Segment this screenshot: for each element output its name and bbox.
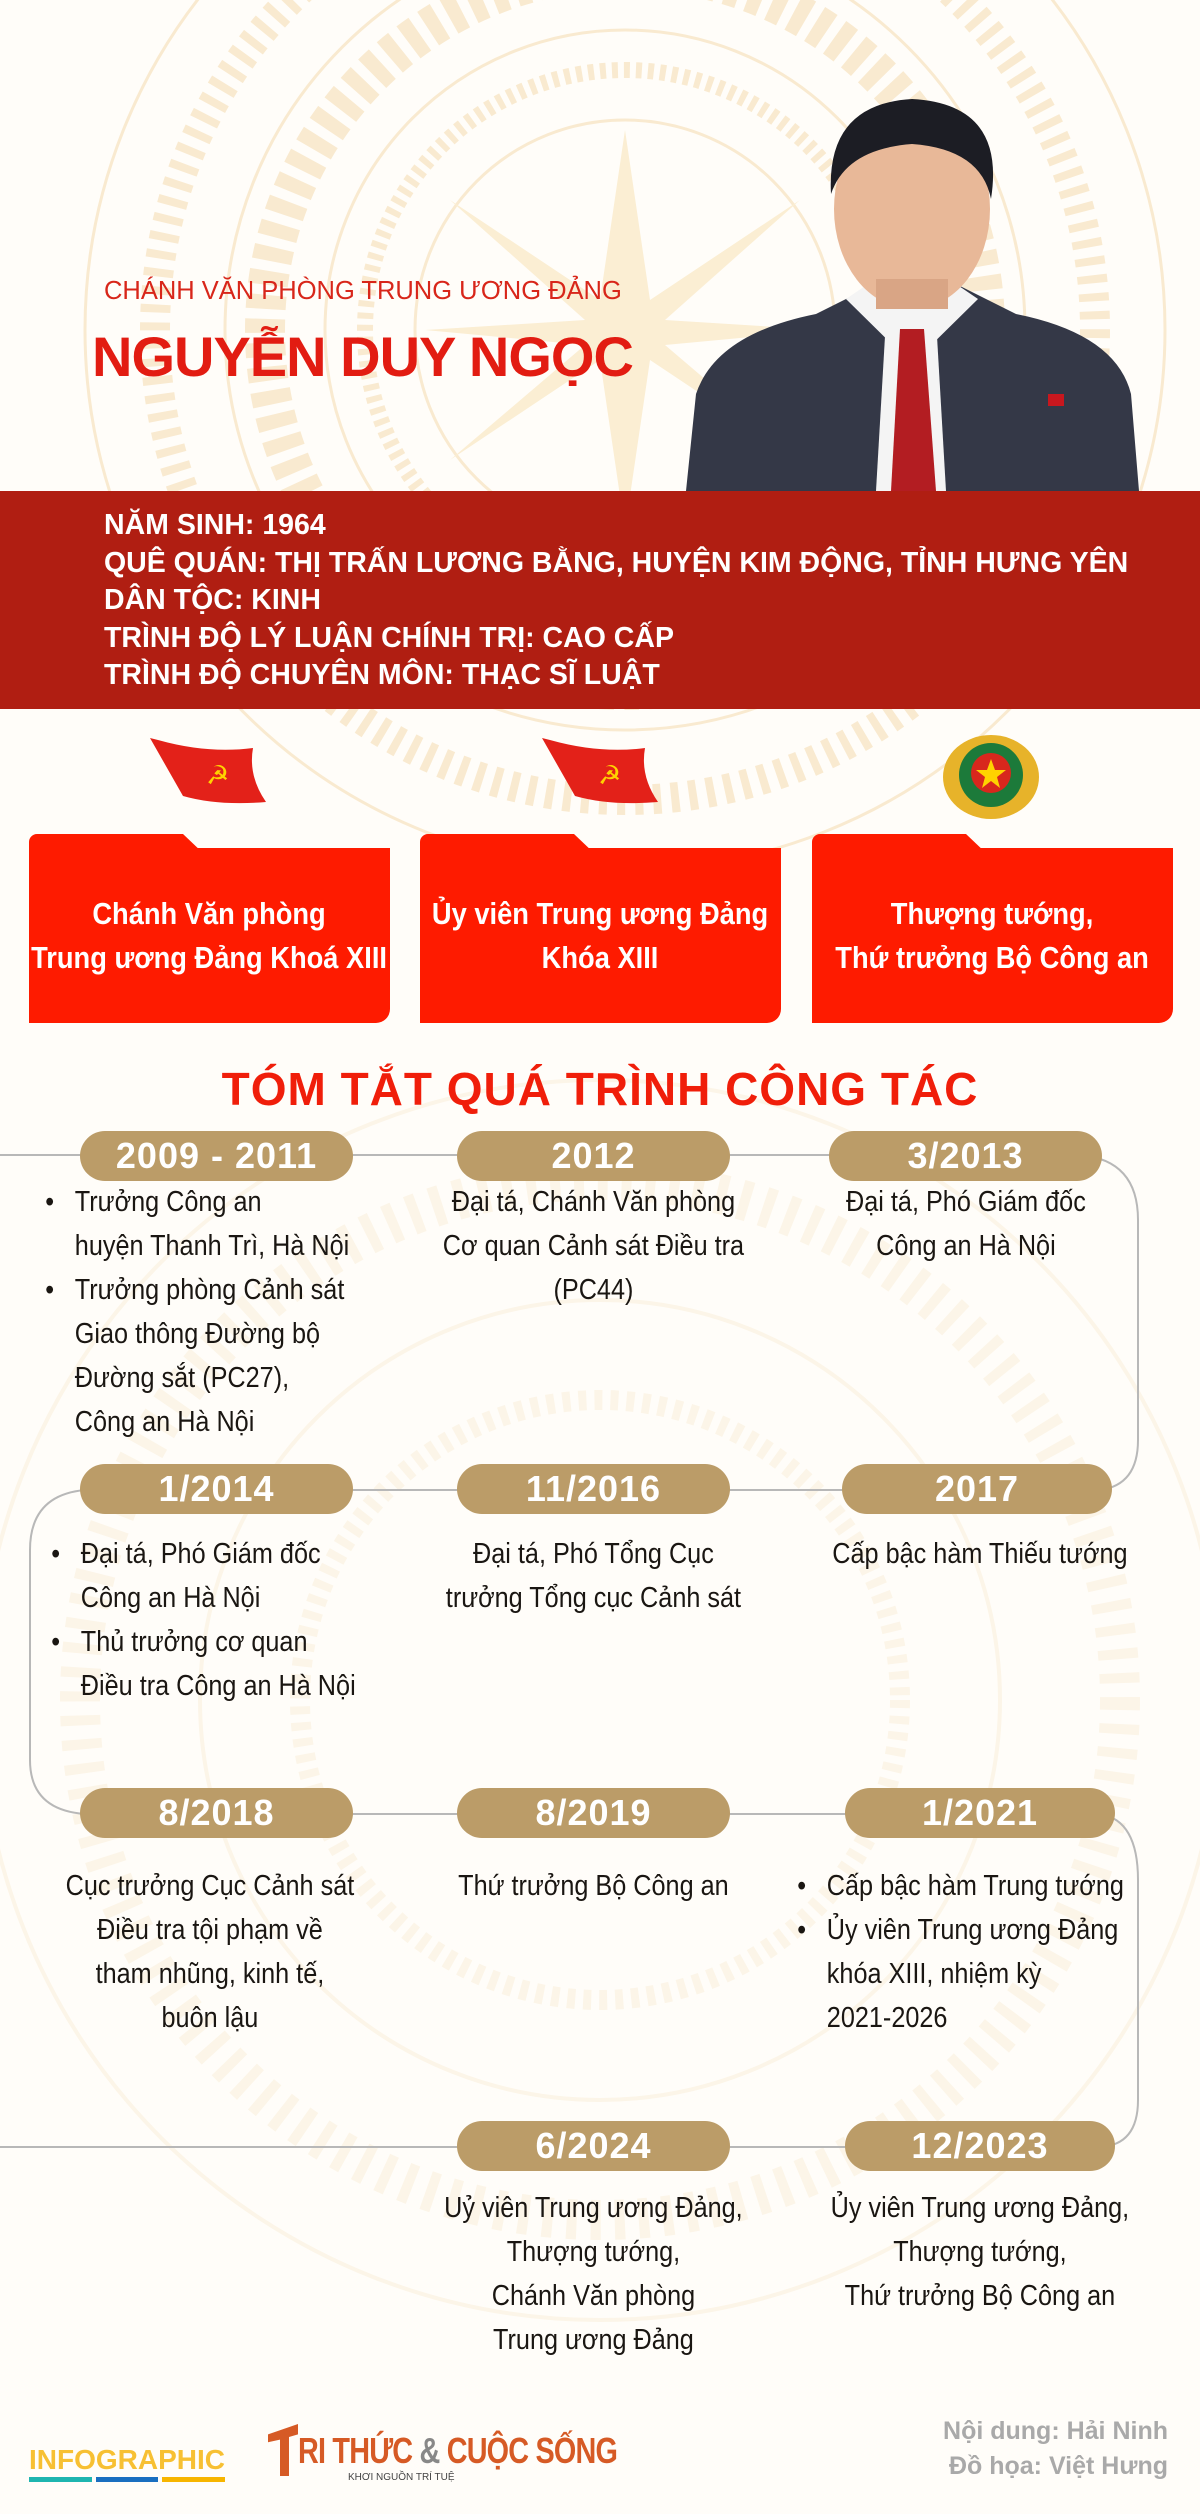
- text: 3/2013: Công an Hà Nội: [876, 1230, 1056, 1262]
- section title: TÓM TẮT QUÁ TRÌNH CÔNG TÁC: [222, 1063, 978, 1115]
- info text: QUÊ QUÁN: THỊ TRẤN LƯƠNG BẰNG, HUYỆN KIM ĐỘNG, TỈNH HƯNG YÊN: [104, 546, 1128, 578]
- text: 12/2023: Thứ trưởng Bộ Công an: [845, 2280, 1115, 2312]
- icon: party flag 1: ☭: [206, 761, 229, 791]
- card 3: Thứ trưởng Bộ Công an: [836, 940, 1149, 974]
- text: 12/2023: Ủy viên Trung ương Đảng,: [831, 2192, 1129, 2224]
- text: 2017: Cấp bậc hàm Thiếu tướng: [832, 1538, 1128, 1570]
- info text: TRÌNH ĐỘ CHUYÊN MÔN: THẠC SĨ LUẬT: [104, 659, 660, 691]
- text: 12/2023: Thượng tướng,: [893, 2236, 1067, 2268]
- text: 2009-2011: Trưởng Công an: [75, 1186, 262, 1218]
- pill: 6/2024: [457, 2121, 730, 2171]
- footer: infographic logo: INFOGRAPHIC: [29, 2444, 225, 2475]
- text: 8/2018: buôn lậu: [162, 2002, 258, 2034]
- text: 8/2018: Điều tra tội phạm về: [97, 1914, 323, 1946]
- footer: credits: Đồ họa: Việt Hưng: [949, 2452, 1168, 2480]
- card 3: [812, 834, 1173, 1023]
- text: 2009-2011: Giao thông Đường bộ: [75, 1318, 320, 1350]
- card 2: Khóa XIII: [542, 940, 659, 974]
- footer: publication logo: KHƠI NGUỒN TRÍ TUỆ: [348, 2472, 455, 2483]
- text: 6/2024: [444, 2192, 743, 2356]
- pill: 1/2014: [80, 1464, 353, 1514]
- icon: party flag 1: [150, 738, 266, 804]
- pill: 11/2016: [457, 1464, 730, 1514]
- subtitle: CHÁNH VĂN PHÒNG TRUNG ƯƠNG ĐẢNG: [104, 277, 622, 305]
- pill: 1/2021: 1/2021: [922, 1792, 1038, 1833]
- text: 1/2021: Cấp bậc hàm Trung tướng: [827, 1870, 1124, 1902]
- pill: 1/2014: 1/2014: [158, 1468, 275, 1509]
- text: 6/2024: Uỷ viên Trung ương Đảng,: [444, 2192, 743, 2224]
- text: 8/2018: [66, 1870, 354, 2034]
- text: 1/2021: khóa XIII, nhiệm kỳ: [827, 1958, 1041, 1990]
- pill: 6/2024: 6/2024: [535, 2125, 652, 2166]
- pill: 2012: 2012: [551, 1135, 636, 1176]
- text: 11/2016: trưởng Tổng cục Cảnh sát: [446, 1582, 741, 1614]
- portrait photo: [686, 99, 1139, 491]
- text: 3/2013: [846, 1186, 1086, 1262]
- pill: 1/2021: [845, 1788, 1115, 1838]
- text: 6/2024: Trung ương Đảng: [493, 2324, 694, 2356]
- pill: 8/2019: [457, 1788, 730, 1838]
- icon: police emblem: [943, 735, 1039, 819]
- text: 11/2016: Đại tá, Phó Tổng Cục: [473, 1538, 714, 1570]
- footer: credits: Nội dung: Hải Ninh: [943, 2417, 1168, 2445]
- text: 3/2013: Đại tá, Phó Giám đốc: [846, 1186, 1086, 1218]
- text: 1/2014: Điều tra Công an Hà Nội: [81, 1670, 356, 1702]
- text: 1/2021: 2021-2026: [827, 2002, 947, 2034]
- info text: DÂN TỘC: KINH: [104, 584, 321, 616]
- card 1: Chánh Văn phòng: [93, 896, 326, 930]
- text: 2009-2011: Công an Hà Nội: [75, 1406, 254, 1438]
- text: 2009-2011: Trưởng phòng Cảnh sát: [75, 1274, 344, 1306]
- text: 1/2014: Đại tá, Phó Giám đốc: [81, 1538, 321, 1570]
- text: 1/2014: [52, 1538, 356, 1702]
- pill: 8/2019: 8/2019: [535, 1792, 652, 1833]
- name title: NGUYỄN DUY NGỌC: [92, 325, 633, 388]
- pill: 8/2018: 8/2018: [158, 1792, 275, 1833]
- icon: party flag 2: ☭: [598, 761, 621, 791]
- text: 1/2014: Công an Hà Nội: [81, 1582, 260, 1614]
- text: 8/2018: Cục trưởng Cục Cảnh sát: [66, 1870, 354, 1902]
- text: 2012: Cơ quan Cảnh sát Điều tra: [443, 1230, 744, 1262]
- info text: NĂM SINH: 1964: [104, 509, 326, 541]
- text: 1/2021: Ủy viên Trung ương Đảng: [827, 1914, 1118, 1946]
- pill: 8/2018: [80, 1788, 353, 1838]
- pill: 2017: 2017: [935, 1468, 1019, 1509]
- text: 8/2019: Thứ trưởng Bộ Công an: [458, 1870, 729, 1902]
- footer: publication logo: RI THỨC & CUỘC SỐNG: [298, 2430, 617, 2471]
- pill: 3/2013: 3/2013: [907, 1135, 1024, 1176]
- text: 2009-2011: Đường sắt (PC27),: [75, 1362, 289, 1394]
- info text: TRÌNH ĐỘ LÝ LUẬN CHÍNH TRỊ: CAO CẤP: [104, 622, 674, 654]
- pill: 11/2016: 11/2016: [526, 1468, 661, 1509]
- text: 11/2016: [446, 1538, 741, 1614]
- text: 1/2014: Thủ trưởng cơ quan: [81, 1626, 308, 1658]
- text: 12/2023: [831, 2191, 1129, 2312]
- pill: 12/2023: [845, 2121, 1115, 2171]
- text: 2012: (PC44): [553, 1274, 633, 1306]
- info text: [104, 508, 1128, 691]
- text: 6/2024: Chánh Văn phòng: [492, 2280, 695, 2312]
- pill: 2009-2011: [80, 1131, 353, 1181]
- text: 1/2021: [798, 1870, 1124, 2034]
- pill: 2012: [457, 1131, 730, 1181]
- footer: credits: [943, 2417, 1168, 2480]
- pill: 2017: [842, 1464, 1112, 1514]
- pill: 2009-2011: 2009 - 2011: [116, 1135, 317, 1176]
- text: 2012: [443, 1186, 744, 1306]
- pill: 12/2023: 12/2023: [911, 2125, 1049, 2166]
- text: 2009-2011: huyện Thanh Trì, Hà Nội: [75, 1230, 349, 1262]
- text: 2009-2011: [46, 1186, 349, 1438]
- text: 6/2024: Thượng tướng,: [507, 2236, 680, 2268]
- card 2: [420, 834, 781, 1023]
- pill: 3/2013: [829, 1131, 1102, 1181]
- text: 8/2018: tham nhũng, kinh tế,: [96, 1958, 324, 1990]
- card 3: Thượng tướng,: [891, 896, 1094, 930]
- card 2: Ủy viên Trung ương Đảng: [432, 896, 769, 930]
- card 1: Trung ương Đảng Khoá XIII: [32, 940, 387, 974]
- footer: publication logo: [268, 2424, 617, 2483]
- icon: party flag 2: [542, 738, 658, 804]
- info band: [0, 491, 1200, 709]
- card 1: [29, 834, 390, 1023]
- text: 2012: Đại tá, Chánh Văn phòng: [452, 1186, 735, 1218]
